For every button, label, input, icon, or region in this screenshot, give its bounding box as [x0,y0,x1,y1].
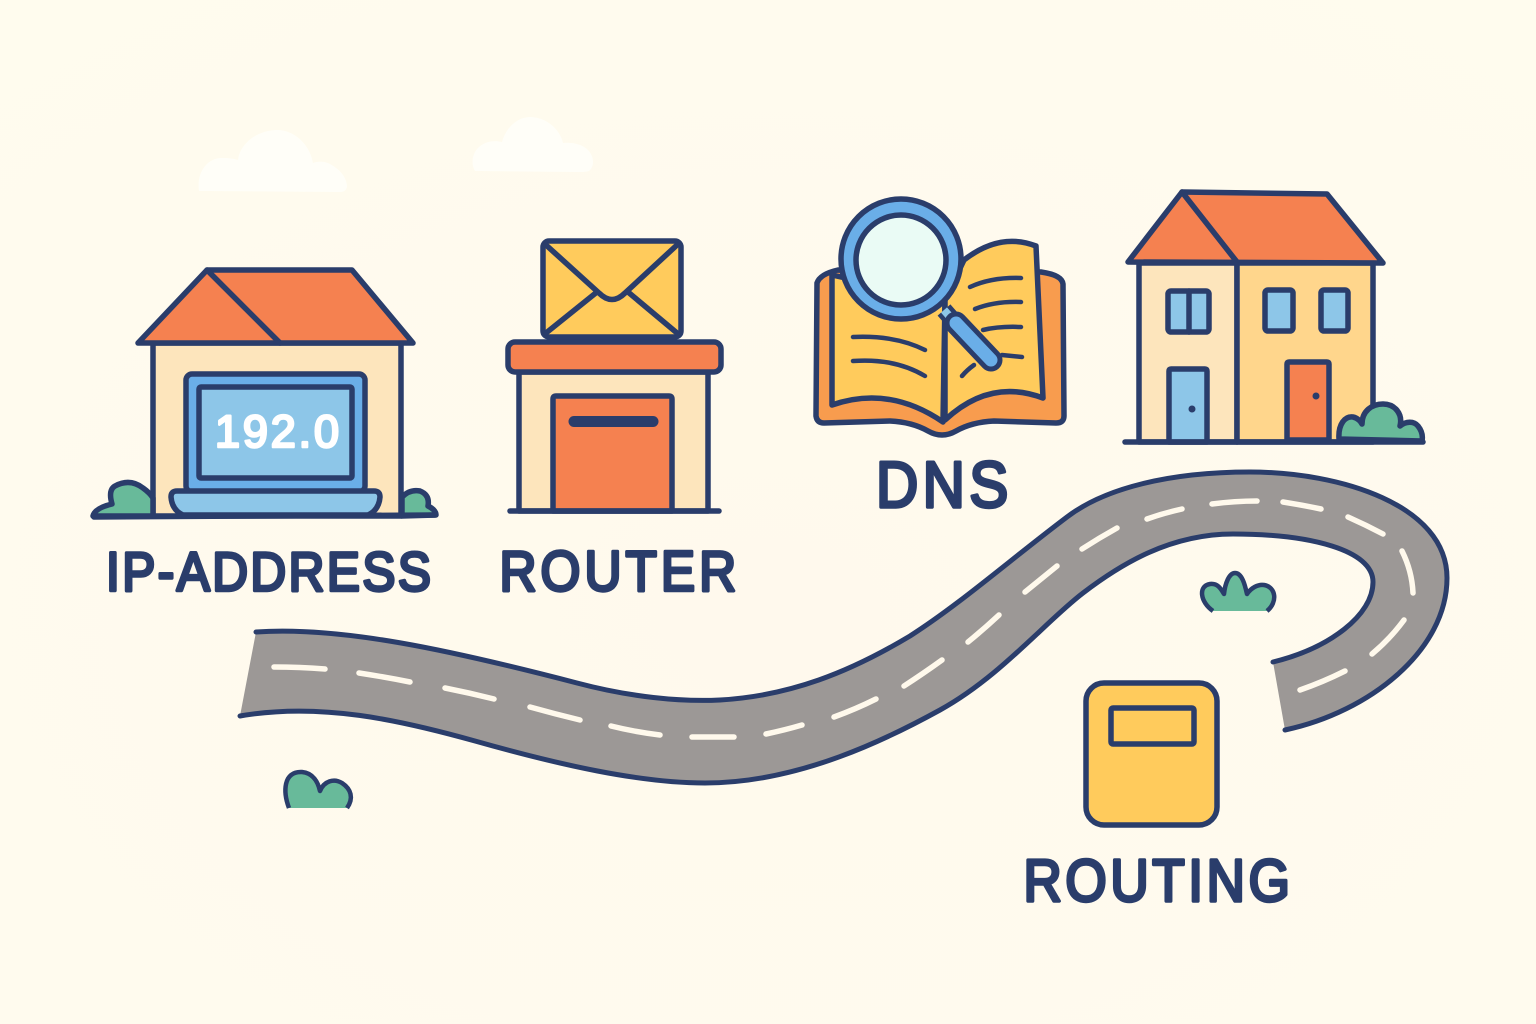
icon: router door [553,396,672,511]
icon: magnifying glass [841,199,991,360]
label: ROUTER: ROUTER [500,540,736,603]
icon: small bush inside curve [1202,573,1274,611]
icon: cloud left [199,130,347,192]
icon: window right [1321,290,1348,331]
icon: roof [1128,192,1383,263]
icon: right wall [1237,263,1373,442]
icon: house roof [138,270,413,343]
icon: right bush [402,491,436,516]
icon: open book [816,241,1064,435]
icon: routing table box [1086,683,1217,825]
panel: destination house [1125,192,1423,442]
road centre dashes [274,501,1413,737]
icon: double window [1168,291,1209,332]
label: IP-ADDRESS: IP-ADDRESS [106,542,431,603]
panel: road [240,472,1447,783]
panel: routing [1024,683,1290,914]
icon: left wall [1139,263,1237,442]
panel: router [500,241,736,603]
panel: DNS book [816,199,1064,522]
icon: orange door [1287,362,1329,440]
icon: bush [1339,404,1422,441]
label: ROUTING: ROUTING [1024,847,1290,914]
panel: IP-address house [93,270,436,603]
label: DNS: DNS [876,449,1008,522]
icon: blue door [1169,369,1207,442]
road top edge [256,472,1447,730]
icon: small bush under road [285,772,351,808]
icon: router walls [519,372,708,511]
icon: router roof slab [508,342,721,372]
road surface [240,472,1447,783]
icon: cloud right [473,117,593,172]
road bottom edge [240,534,1373,783]
icon: laptop [171,374,380,515]
icon: left bush [93,482,153,516]
icon: house walls [153,343,401,516]
laptop screen address: 192.0 [215,406,339,457]
icon: window centre [1265,290,1293,331]
icon: envelope [543,241,681,337]
